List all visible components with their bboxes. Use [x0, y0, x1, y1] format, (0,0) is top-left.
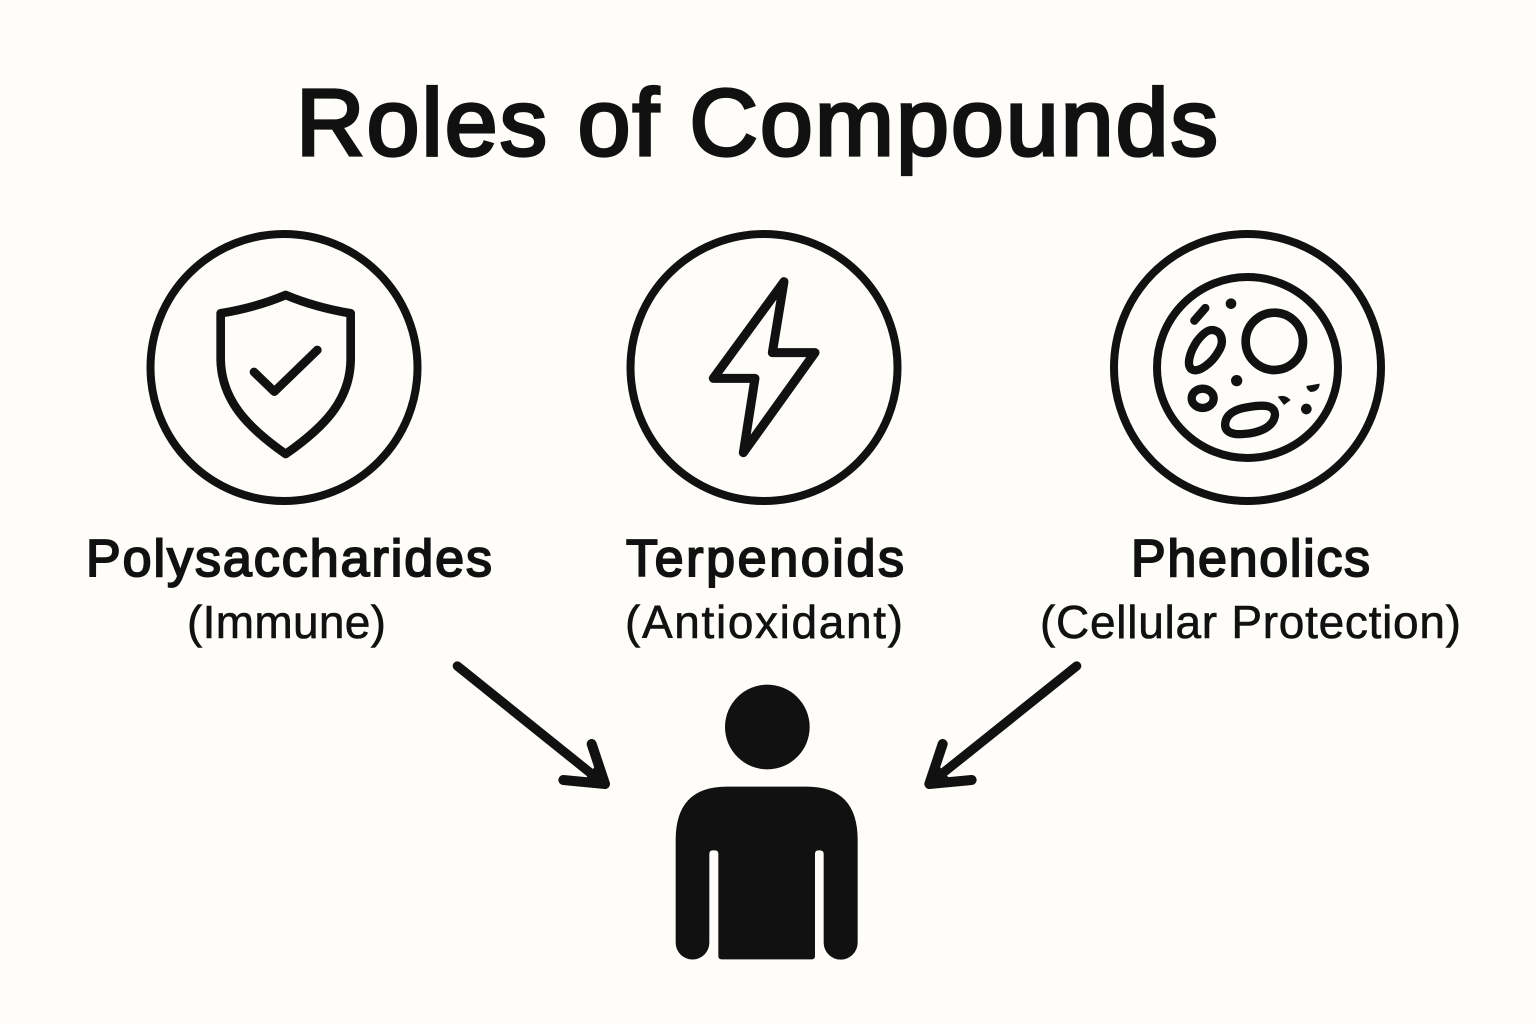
label: polysaccharides: Polysaccharides [86, 530, 492, 588]
label: polysaccharides: (Immune) [187, 596, 386, 648]
label: terpenoids: Terpenoids [626, 530, 904, 588]
label: phenolics: Phenolics [1131, 530, 1370, 588]
label: terpenoids: (Antioxidant) [625, 596, 903, 648]
label: terpenoids [625, 530, 904, 648]
icon: lightning bolt in circle [630, 234, 898, 501]
arrow: right to person [929, 666, 1077, 784]
icon: cell in circle [1114, 234, 1381, 501]
title: Roles of Compounds [296, 70, 1218, 176]
label: phenolics: (Cellular Protection) [1040, 596, 1461, 648]
arrow: left to person [457, 666, 605, 784]
icon: person [676, 685, 858, 960]
label: phenolics [1040, 530, 1461, 648]
icon: shield in circle [150, 234, 418, 501]
label: polysaccharides [86, 530, 492, 648]
